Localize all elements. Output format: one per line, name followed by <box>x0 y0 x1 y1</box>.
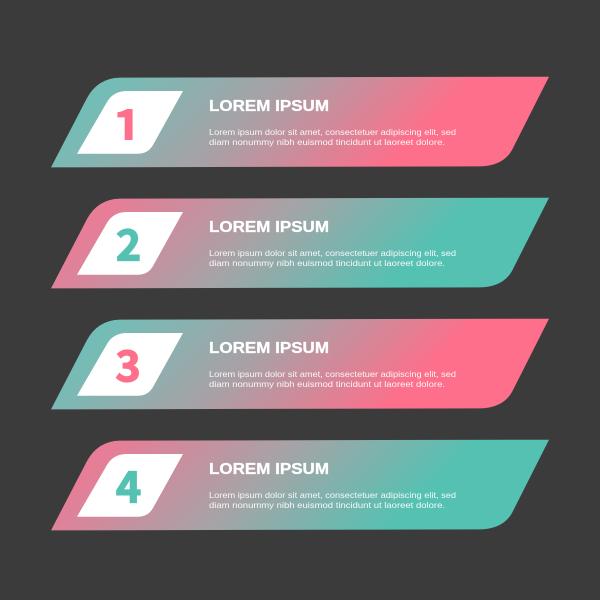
banner 2 body text: diam nonummy nibh euismod tincidunt ut laoreet dolore. <box>209 258 445 268</box>
banner 2 number: 2 <box>116 212 141 274</box>
banner 2 gradient shape <box>51 198 549 288</box>
banner 4 number: 4 <box>116 454 141 516</box>
banner 3 body text: Lorem ipsum dolor sit amet, consectetuer adipiscing elit, sed <box>209 369 456 379</box>
banner 1 body text: diam nonummy nibh euismod tincidunt ut laoreet dolore. <box>209 137 445 147</box>
banner 3 number card <box>77 333 183 396</box>
banner 1 number card <box>77 91 183 154</box>
banner 1 gradient shape <box>51 77 549 167</box>
banner 2 body text: Lorem ipsum dolor sit amet, consectetuer adipiscing elit, sed <box>209 248 456 258</box>
banner 1 heading: LOREM IPSUM <box>209 98 329 115</box>
banner 3 body text <box>209 369 456 389</box>
banner 2 number card <box>77 212 183 275</box>
banner 4 number card <box>77 454 183 517</box>
banner 2 heading: LOREM IPSUM <box>209 219 329 236</box>
banner 2 body text <box>209 248 456 268</box>
banner 4 gradient shape <box>51 440 549 530</box>
banner 3 number: 3 <box>115 332 141 394</box>
banner 3 body text: diam nonummy nibh euismod tincidunt ut laoreet dolore. <box>209 379 445 389</box>
banner 3 heading: LOREM IPSUM <box>209 340 329 357</box>
banner 4 body text <box>209 490 456 510</box>
banner 1 body text: Lorem ipsum dolor sit amet, consectetuer adipiscing elit, sed <box>209 127 456 137</box>
banner 1 body text <box>209 127 456 147</box>
banner 3 <box>51 319 549 409</box>
banner 3 gradient shape <box>51 319 549 409</box>
banner 4 <box>51 440 549 530</box>
banner 1 <box>51 77 549 167</box>
banner 4 body text: Lorem ipsum dolor sit amet, consectetuer adipiscing elit, sed <box>209 490 456 500</box>
banner 1 number: 1 <box>112 85 143 164</box>
banner 4 heading: LOREM IPSUM <box>209 461 329 478</box>
banner 4 body text: diam nonummy nibh euismod tincidunt ut laoreet dolore. <box>209 500 445 510</box>
banner 2 <box>51 198 549 288</box>
